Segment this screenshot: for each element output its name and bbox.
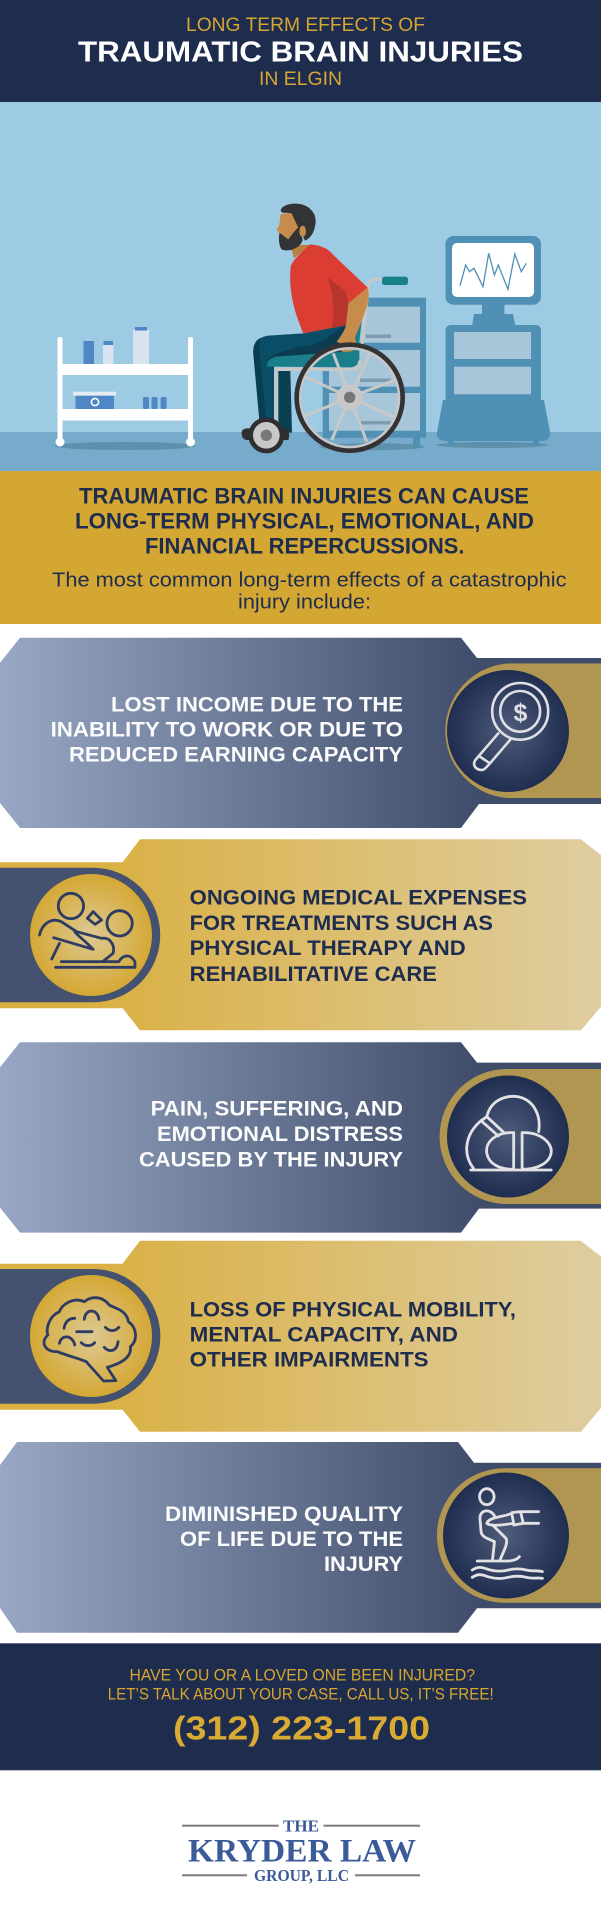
icon: magnifying glass with dollar sign bbox=[474, 683, 548, 770]
icon: brain bbox=[44, 1298, 136, 1381]
logo: The Kryder Law Group, LLC: KRYDER LAW bbox=[188, 1834, 416, 1870]
call to action panel bbox=[0, 1643, 601, 1770]
effect text bbox=[190, 1299, 516, 1372]
title line: long term effects: LONG TERM EFFECTS OF bbox=[186, 15, 425, 36]
panel: lost income bbox=[0, 638, 601, 828]
title line: in Elgin: IN ELGIN bbox=[259, 68, 342, 90]
phone number: (312) 223-1700 bbox=[173, 1709, 430, 1746]
effect text: MENTAL CAPACITY, AND bbox=[190, 1324, 458, 1347]
effect text: OF LIFE DUE TO THE bbox=[180, 1528, 403, 1551]
logo: The Kryder Law Group, LLC: THE bbox=[283, 1817, 319, 1836]
intro body text bbox=[52, 570, 566, 614]
intro panel bbox=[0, 471, 601, 624]
effect text: LOST INCOME DUE TO THE bbox=[111, 694, 403, 717]
effect text: OTHER IMPAIRMENTS bbox=[190, 1349, 428, 1372]
panel: medical expenses bbox=[0, 839, 601, 1030]
illustration: drawer cabinet bbox=[319, 298, 426, 450]
intro heading bbox=[75, 483, 534, 559]
intro heading: LONG-TERM PHYSICAL, EMOTIONAL, AND bbox=[75, 509, 534, 534]
effect text bbox=[51, 694, 403, 767]
panel: quality of life bbox=[0, 1442, 601, 1633]
intro body text: injury include: bbox=[238, 592, 371, 614]
call to action text bbox=[108, 1666, 494, 1703]
intro heading: FINANCIAL REPERCUSSIONS. bbox=[145, 534, 464, 559]
effect text: FOR TREATMENTS SUCH AS bbox=[190, 912, 493, 935]
effect text: DIMINISHED QUALITY bbox=[165, 1503, 403, 1526]
effect text bbox=[139, 1098, 403, 1172]
effect text: REDUCED EARNING CAPACITY bbox=[69, 744, 403, 767]
call to action text: LET’S TALK ABOUT YOUR CASE, CALL US, IT’S FREE! bbox=[108, 1685, 494, 1703]
icon: magnifying glass with dollar sign: $ bbox=[514, 699, 528, 727]
intro body text: The most common long-term effects of a catastrophic bbox=[52, 570, 566, 592]
title banner bbox=[0, 0, 601, 102]
icon: pills bbox=[467, 1096, 551, 1170]
title line: traumatic brain injuries: TRAUMATIC BRAIN INJURIES bbox=[78, 36, 523, 68]
effect text: ONGOING MEDICAL EXPENSES bbox=[190, 886, 527, 909]
illustration: man in wheelchair bbox=[242, 204, 408, 453]
effect text: INJURY bbox=[324, 1553, 403, 1576]
panel: loss of mobility bbox=[0, 1241, 601, 1432]
intro heading: TRAUMATIC BRAIN INJURIES CAN CAUSE bbox=[79, 483, 529, 508]
effect text: CAUSED BY THE INJURY bbox=[139, 1149, 403, 1172]
illustration: hospital room scene bbox=[0, 102, 601, 471]
effect text: PHYSICAL THERAPY AND bbox=[190, 937, 466, 960]
icon: physical therapy bbox=[39, 893, 135, 967]
call to action text: HAVE YOU OR A LOVED ONE BEEN INJURED? bbox=[130, 1666, 475, 1684]
effect text: REHABILITATIVE CARE bbox=[190, 963, 437, 986]
panel: pain and suffering bbox=[0, 1042, 601, 1233]
illustration: patient monitor bbox=[436, 236, 550, 448]
effect text: PAIN, SUFFERING, AND bbox=[151, 1098, 403, 1121]
effect text: INABILITY TO WORK OR DUE TO bbox=[51, 719, 403, 742]
icon: water skier bbox=[472, 1489, 542, 1579]
illustration: supply cart bbox=[55, 327, 195, 450]
effect text: EMOTIONAL DISTRESS bbox=[157, 1123, 403, 1146]
effect text: LOSS OF PHYSICAL MOBILITY, bbox=[190, 1299, 516, 1322]
logo: The Kryder Law Group, LLC: GROUP, LLC bbox=[254, 1866, 349, 1885]
logo: The Kryder Law Group, LLC bbox=[182, 1817, 420, 1885]
effect text bbox=[165, 1503, 403, 1576]
effect text bbox=[190, 886, 527, 986]
